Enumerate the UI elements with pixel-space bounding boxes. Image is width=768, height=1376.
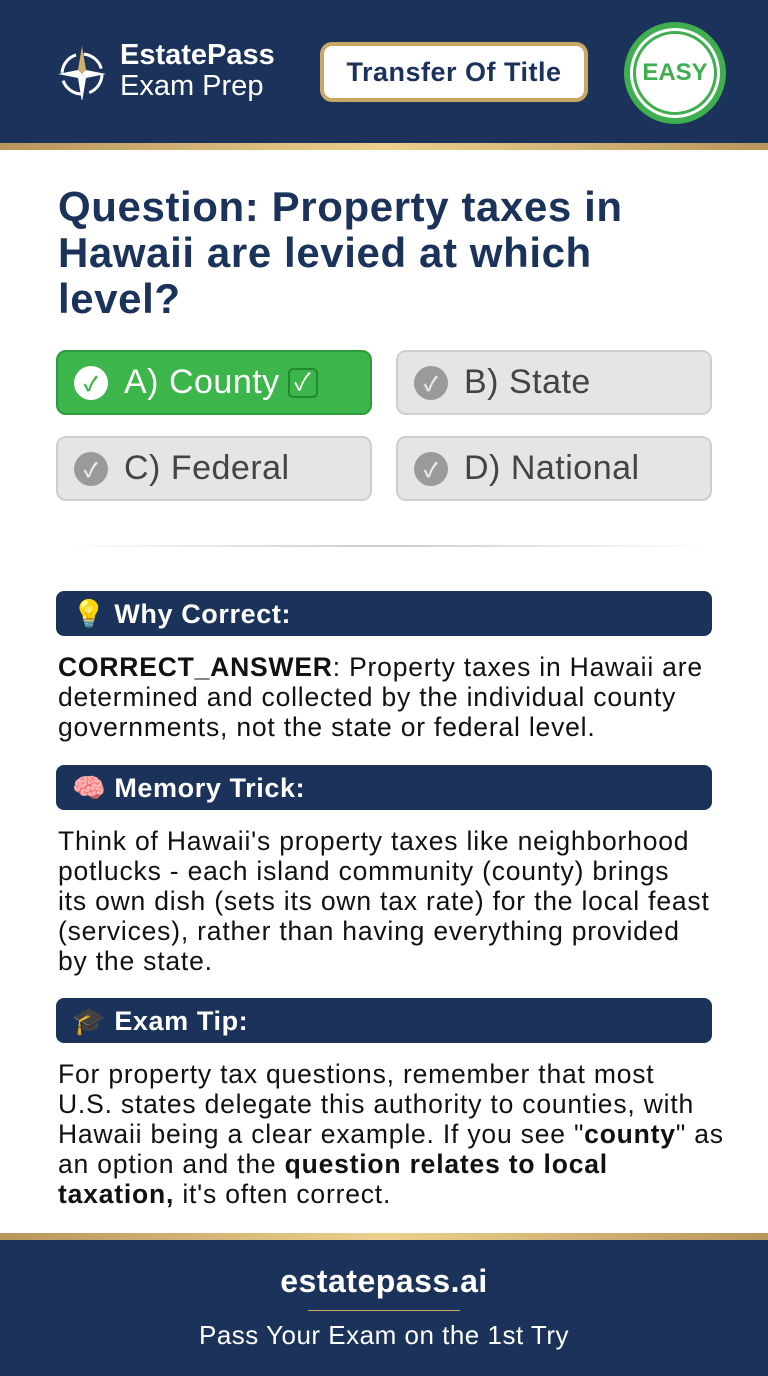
option B: ✓ bbox=[424, 374, 438, 396]
gold stripe top bbox=[0, 143, 768, 150]
text: memory trick bbox=[58, 826, 710, 976]
option C bbox=[56, 436, 372, 501]
text: exam tip bbox=[58, 1059, 724, 1209]
logo text: Exam Prep bbox=[120, 70, 263, 102]
option B bbox=[396, 350, 712, 415]
option A correct: A) County bbox=[124, 363, 280, 401]
heading: why correct bbox=[56, 591, 712, 636]
option A correct: ✓ bbox=[84, 374, 98, 396]
icon: compass bbox=[58, 46, 106, 100]
option C: ✓ bbox=[84, 460, 98, 482]
text: why correct: CORRECT_ANSWER: Property taxes in Hawaii are bbox=[58, 652, 703, 682]
question: Question: Property taxes in bbox=[58, 183, 623, 230]
text: exam tip: Hawaii being a clear example. If you see "county" as bbox=[58, 1119, 724, 1149]
text: exam tip: For property tax questions, remember that most bbox=[58, 1059, 654, 1089]
footer tagline: Pass Your Exam on the 1st Try bbox=[199, 1320, 569, 1350]
option D bbox=[396, 436, 712, 501]
text: why correct: governments, not the state or federal level. bbox=[58, 712, 596, 742]
text: why correct bbox=[58, 652, 703, 742]
question: level? bbox=[58, 275, 181, 322]
option A correct bbox=[56, 350, 372, 415]
badge: EASY bbox=[624, 22, 726, 124]
logo text: EstatePass bbox=[120, 39, 275, 71]
title pill bbox=[320, 42, 588, 102]
heading: exam tip: 🎓 Exam Tip: bbox=[72, 1006, 248, 1036]
question bbox=[58, 183, 623, 322]
text: memory trick: potlucks - each island community (county) brings bbox=[58, 856, 669, 886]
header bar bbox=[0, 0, 768, 143]
text: memory trick: its own dish (sets its own tax rate) for the local feast bbox=[58, 886, 710, 916]
option D: D) National bbox=[464, 449, 640, 487]
logo text bbox=[120, 39, 275, 102]
heading: exam tip bbox=[56, 998, 712, 1043]
heading: memory trick bbox=[56, 765, 712, 810]
title pill: Transfer Of Title bbox=[346, 56, 562, 86]
question: Hawaii are levied at which bbox=[58, 229, 592, 276]
option C: C) Federal bbox=[124, 449, 290, 487]
text: why correct: determined and collected by the individual county bbox=[58, 682, 676, 712]
badge: EASY: EASY bbox=[642, 59, 708, 86]
text: memory trick: (services), rather than having everything provided bbox=[58, 916, 680, 946]
text: exam tip: an option and the question relates to local bbox=[58, 1149, 608, 1179]
text: exam tip: taxation, it's often correct. bbox=[58, 1179, 391, 1209]
option B: B) State bbox=[464, 363, 591, 401]
text: memory trick: by the state. bbox=[58, 946, 213, 976]
option A correct: ✓ bbox=[294, 368, 311, 396]
option D: ✓ bbox=[424, 460, 438, 482]
footer bbox=[0, 1233, 768, 1376]
text: memory trick: Think of Hawaii's property taxes like neighborhood bbox=[58, 826, 689, 856]
footer site: estatepass.ai bbox=[280, 1263, 488, 1299]
heading: memory trick: 🧠 Memory Trick: bbox=[72, 772, 305, 802]
heading: why correct: 💡 Why Correct: bbox=[72, 598, 291, 628]
text: exam tip: U.S. states delegate this authority to counties, with bbox=[58, 1089, 694, 1119]
logo bbox=[58, 39, 275, 102]
